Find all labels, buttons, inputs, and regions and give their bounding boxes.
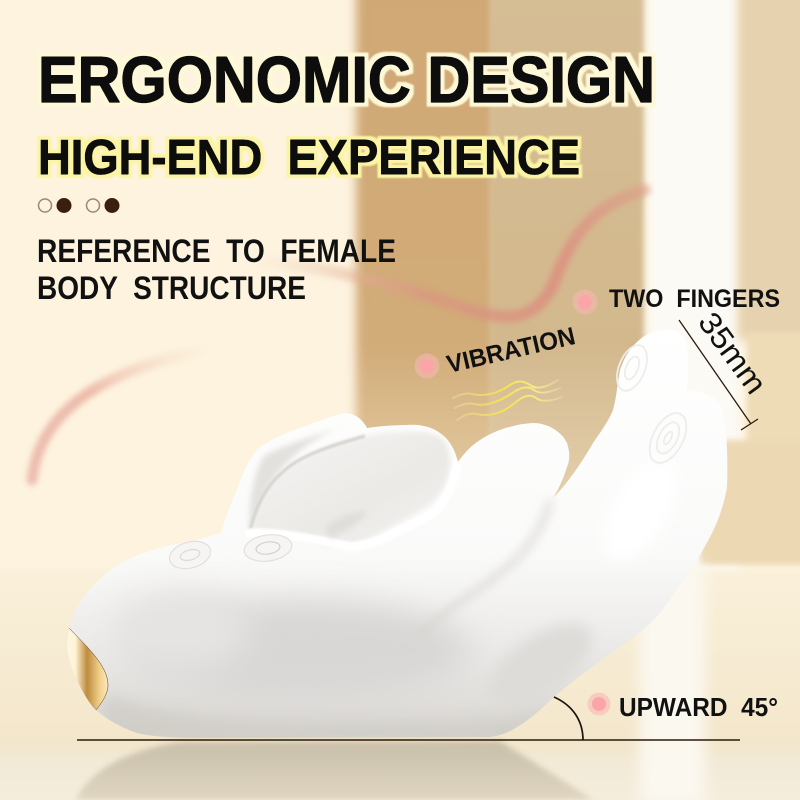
- touch buttons on body: [166, 532, 294, 573]
- bowl inner dimple: [328, 514, 362, 535]
- description text: [37, 233, 396, 306]
- icon: vibration waves: [453, 380, 562, 420]
- bowl rim highlight: [250, 462, 458, 547]
- petal bowl: [250, 432, 450, 546]
- gold opening: [66, 628, 108, 710]
- product: white curved device: [66, 330, 727, 745]
- floor reflection: [76, 741, 594, 800]
- label: two fingers: TWO FINGERS: [609, 285, 780, 313]
- product shading: [104, 500, 590, 738]
- finger tip spirals: [611, 341, 694, 469]
- decorative dots: [38, 198, 120, 213]
- angle arc: [554, 697, 583, 740]
- description text: REFERENCE TO FEMALE: [37, 233, 396, 269]
- label: upward 45: UPWARD 45°: [619, 692, 778, 722]
- description text: BODY STRUCTURE: [37, 270, 306, 306]
- subtitle: HIGH-END EXPERIENCE: [38, 131, 580, 185]
- dimension: 35mm: 35mm: [691, 306, 774, 401]
- decorative pink ribbon: [32, 190, 645, 480]
- flap inner shadow: [248, 432, 325, 523]
- title: ERGONOMIC DESIGN: [38, 43, 655, 116]
- label: vibration: VIBRATION: [444, 322, 578, 379]
- baseline: [77, 739, 740, 741]
- dimension: 35mm: [679, 306, 774, 430]
